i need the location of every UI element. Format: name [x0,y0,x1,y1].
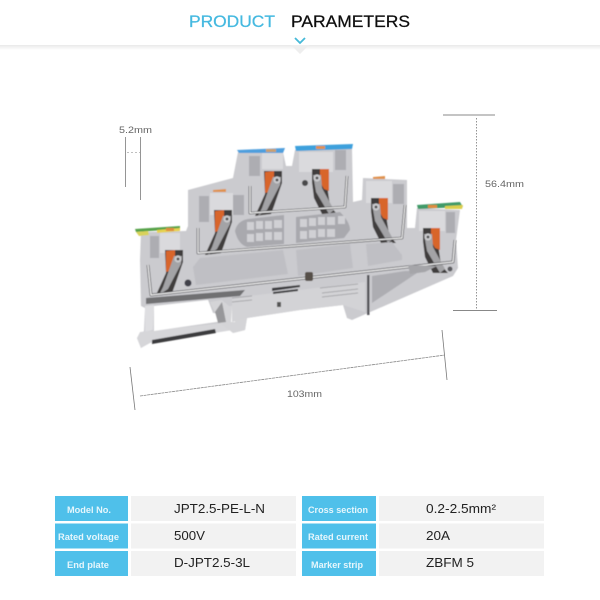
colour strip: right-centre blue [295,144,353,151]
wire slots [150,150,455,258]
colour strip: left green-yellow [135,226,180,232]
foot slot [152,329,216,344]
row: End plate / Marker strip: Marker strip [311,560,363,570]
row: End plate / Marker strip: ZBFM 5 [426,556,474,570]
lower rib details [232,265,437,315]
terminal block connector [135,144,463,348]
levers [156,169,448,295]
title [189,13,410,31]
parameter table [55,496,544,576]
module top faces [160,152,445,253]
silver conductor frames [148,176,455,295]
right grid panel [296,212,350,243]
header divider [0,45,600,54]
row: Rated voltage / Rated current: 20A [426,529,451,543]
dimension: 103mm: 103mm [287,389,322,400]
connector body [137,148,460,348]
row: End plate / Marker strip: D-JPT2.5-3L [174,556,250,570]
din clip foot highlights [145,305,154,332]
dark channel under conductor [146,290,245,304]
dimension: 56.4mm: 56.4mm [485,179,524,190]
colour strip: left-centre blue [237,148,285,153]
row: End plate / Marker strip: End plate [67,560,109,570]
row: Model No. / Cross section: Model No. [67,505,111,515]
row: Model No. / Cross section: Cross section [308,505,368,515]
row: Rated voltage / Rated current: Rated current [308,532,368,542]
row: Model No. / Cross section [55,496,544,521]
lower base plate [232,282,365,322]
row: Rated voltage / Rated current: Rated voltage [58,532,119,542]
dimension: 5.2mm: 5.2mm [119,125,152,135]
icon: chevron [295,38,305,43]
row: End plate / Marker strip [55,551,544,576]
orange markers on mid tiers [213,189,226,192]
title word: PRODUCT: PRODUCT [189,13,275,31]
row: Rated voltage / Rated current: 500V [174,529,206,543]
colour strip: right green-yellow [417,202,463,209]
row: Rated voltage / Rated current [55,524,544,548]
title word: PARAMETERS: PARAMETERS [291,13,410,31]
row: Model No. / Cross section: JPT2.5-PE-L-N [174,502,265,516]
dimension: 5.2mm [119,125,152,200]
dimension: 103mm [130,330,447,410]
row: Model No. / Cross section: 0.2-2.5mm² [426,502,496,516]
left grid panel [235,215,284,247]
small screw details [184,180,452,286]
lower recess panels [193,242,402,285]
